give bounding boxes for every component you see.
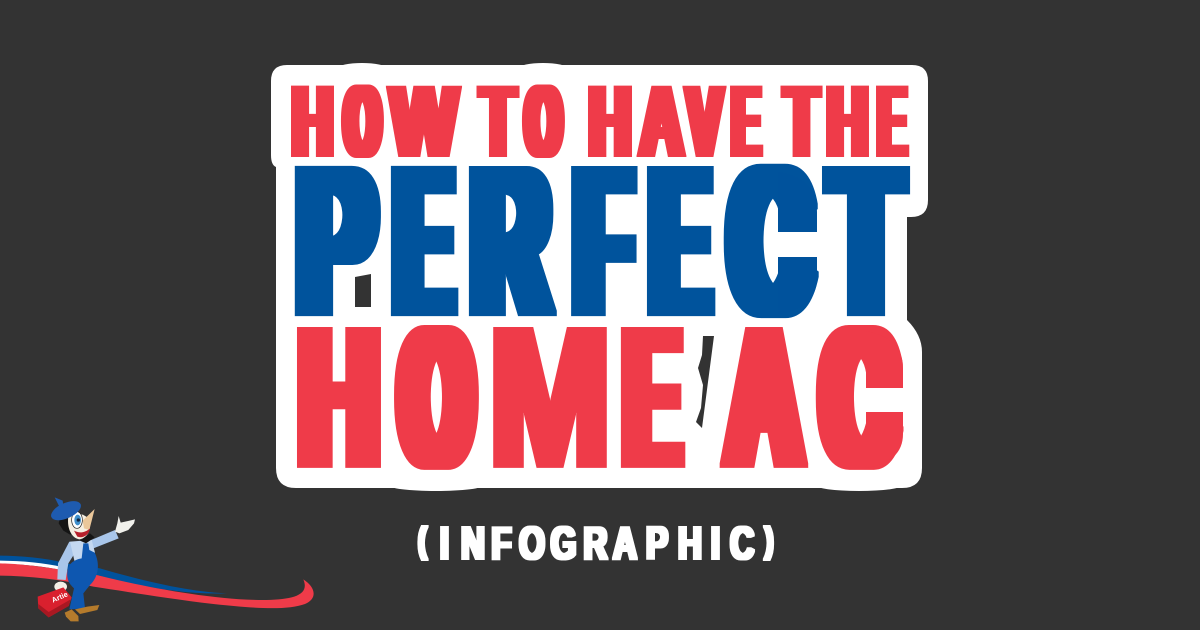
title line: PERFECT: C (731, 122, 810, 359)
title line: HOME AC: H (300, 286, 378, 508)
overalls (67, 543, 98, 609)
beret (48, 497, 84, 524)
title line: PERFECT (298, 122, 900, 359)
title line: HOME AC: A (727, 286, 801, 509)
toolbox: Artie (50, 590, 69, 605)
title line: HOW TO HAVE THE: E (878, 66, 906, 179)
title line: HOW TO HAVE THE: H (827, 65, 868, 179)
title line: HOME AC: C (824, 287, 894, 509)
title line: PERFECT: R (473, 123, 548, 359)
title line: HOW TO HAVE THE: E (732, 66, 760, 179)
title line: PERFECT: E (396, 122, 451, 358)
head (59, 513, 75, 535)
icon: mascot figure (38, 497, 135, 621)
title line: HOW TO HAVE THE: T (481, 65, 515, 179)
title line: HOW TO HAVE THE: O (345, 65, 380, 179)
title line: HOME AC: O (402, 286, 471, 509)
title line: HOME AC: M (489, 285, 611, 508)
title line: PERFECT: F (576, 124, 630, 359)
title line: PERFECT: E (652, 123, 708, 358)
left arm and hand (57, 542, 80, 580)
shirt (70, 540, 95, 563)
shoes (75, 605, 99, 614)
title line: HOW TO HAVE THE: H (292, 65, 333, 179)
title line: PERFECT: P (298, 123, 374, 358)
title line: HOW TO HAVE THE: A (640, 64, 683, 179)
subtitle: (INFOGRAPHIC): ( (418, 520, 427, 561)
red, white and blue swoosh (0, 556, 314, 608)
mascot and swoosh (0, 497, 314, 621)
title line: HOW TO HAVE THE: H (589, 64, 631, 179)
title line: HOME AC: E (626, 287, 678, 509)
title line: HOW TO HAVE THE: O (526, 65, 561, 179)
right arm and hand (87, 530, 119, 548)
title line: HOME AC (300, 285, 903, 509)
title line: PERFECT: T (832, 123, 900, 359)
title line: HOW TO HAVE THE: T (785, 66, 818, 179)
title line: HOW TO HAVE THE: W (391, 65, 457, 179)
title line: HOW TO HAVE THE (292, 64, 906, 179)
subtitle: (INFOGRAPHIC): ) (765, 520, 773, 561)
white sticker backing (271, 63, 928, 491)
subtitle: (INFOGRAPHIC): INFOGRAPHIC (440, 519, 754, 569)
title line: HOW TO HAVE THE: V (687, 66, 722, 179)
